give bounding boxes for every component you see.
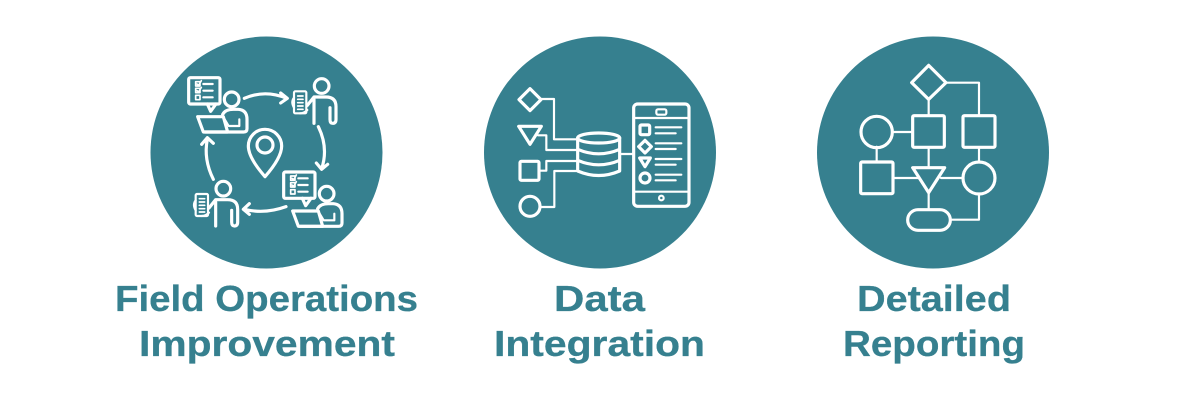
circle badge: data integration: [484, 36, 716, 268]
panel: field operations improvement: [115, 36, 418, 364]
icon: location pin: [248, 129, 282, 177]
icon: source shapes: [519, 89, 541, 216]
icon: bottom-left person with tablet: [194, 181, 238, 226]
circle badge: detailed reporting: [817, 36, 1049, 268]
heading: field operations improvement: Improvement: [139, 323, 395, 364]
panel: data integration: [484, 36, 716, 364]
icon: database: [578, 133, 620, 175]
flowchart connectors: [877, 83, 979, 220]
heading: detailed reporting: [843, 278, 1025, 364]
panel: detailed reporting: [817, 36, 1049, 364]
arrow: right: [316, 127, 328, 169]
icon: field operations cycle: [189, 78, 342, 226]
flowchart shapes: [861, 65, 995, 230]
heading: field operations improvement: Field Operations: [115, 278, 418, 319]
arrow: top: [244, 93, 287, 103]
connector lines: [538, 99, 634, 207]
heading: detailed reporting: Reporting: [843, 323, 1025, 364]
heading: data integration: Integration: [494, 323, 705, 364]
heading: data integration: Data: [554, 278, 646, 319]
arrow: bottom: [243, 204, 286, 214]
circle badge: field operations: [150, 36, 382, 268]
icon: top-left person with laptop and checklist: [189, 78, 247, 132]
icon: top-right person with tablet: [292, 79, 336, 123]
heading: detailed reporting: Detailed: [857, 278, 1011, 319]
icon: smartphone: [634, 104, 689, 206]
arrow: left: [202, 138, 213, 179]
heading: field operations improvement: [115, 278, 418, 364]
icon: flowchart: [861, 65, 995, 230]
icon: data integration: [519, 89, 689, 216]
icon: bottom-right person with laptop and checklist: [284, 172, 342, 226]
heading: data integration: [494, 278, 705, 364]
